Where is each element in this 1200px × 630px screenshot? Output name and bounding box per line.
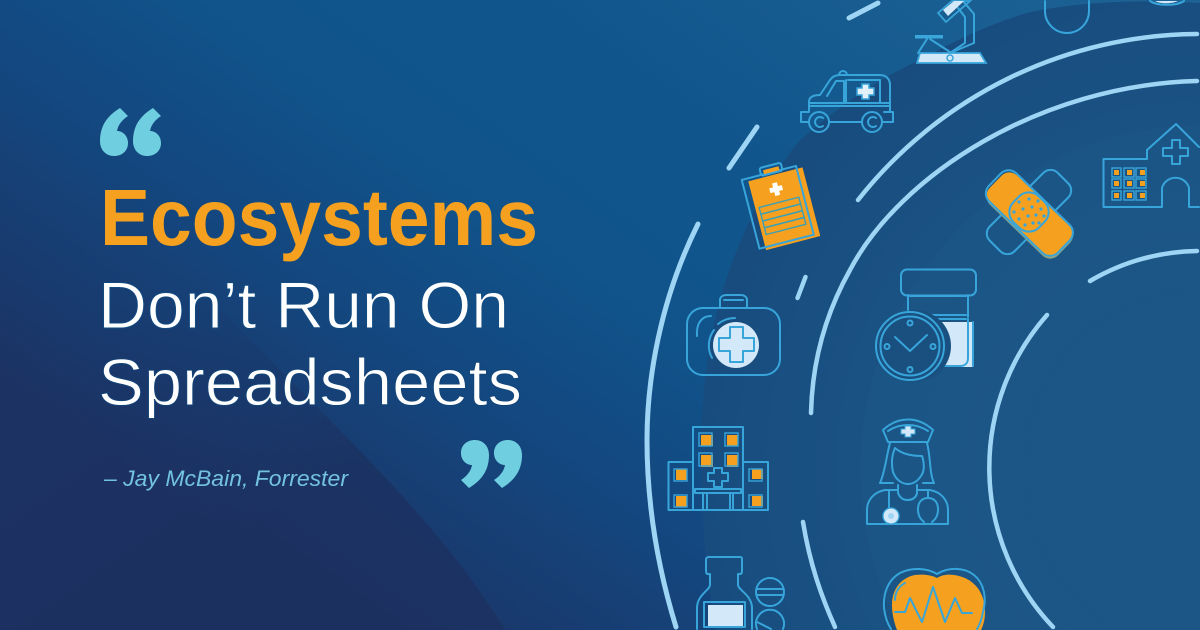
icon: bandage bbox=[980, 166, 1079, 263]
concentric arcs bbox=[647, 3, 1197, 627]
icon: opening quote bbox=[100, 108, 161, 156]
attribution: – Jay McBain, Forrester bbox=[103, 466, 350, 491]
icon: first aid kit bbox=[687, 295, 780, 375]
icon: ambulance bbox=[801, 71, 893, 132]
icon: nurse bbox=[867, 420, 948, 524]
heading: Spreadsheets: Spreadsheets bbox=[98, 345, 522, 419]
heading: Ecosystems: Ecosystems bbox=[100, 173, 538, 262]
heading: Don't Run On: Don’t Run On bbox=[98, 268, 509, 342]
icon: partial top right bbox=[1150, 1, 1184, 5]
icon: closing quote bbox=[461, 440, 522, 488]
icon: pill bottle bbox=[697, 557, 784, 629]
icon: hospital with chapel roof bbox=[1104, 124, 1199, 207]
icon: capsule bbox=[1045, 1, 1089, 33]
icon: microscope bbox=[915, 1, 986, 63]
icon: heart bbox=[884, 569, 985, 630]
icon: hospital building bbox=[668, 427, 768, 510]
icon: clipboard bbox=[740, 158, 820, 252]
icon: clock with jar bbox=[876, 270, 976, 382]
